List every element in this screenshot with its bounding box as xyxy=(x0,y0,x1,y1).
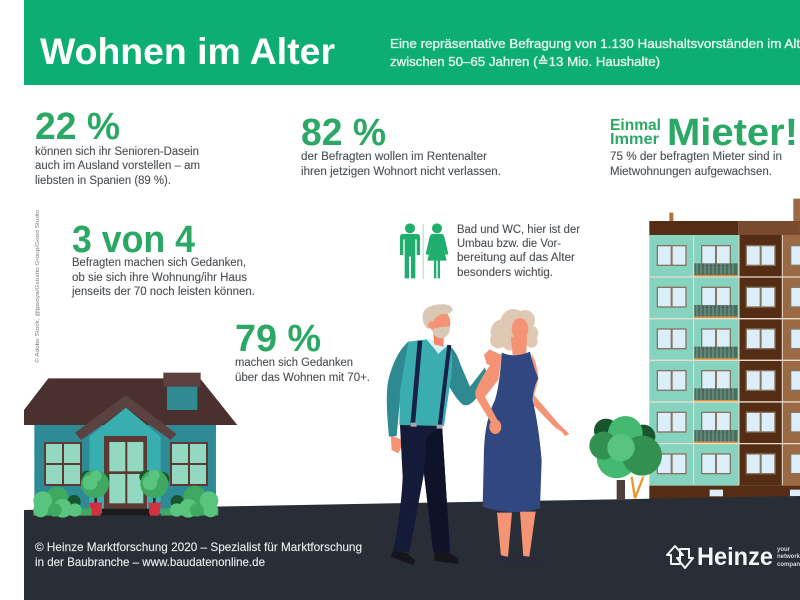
stat: 82 % xyxy=(301,112,501,178)
icon: logo arrows xyxy=(667,546,693,568)
stat: Einmal Mieter, immer Mieter: Immer xyxy=(610,131,659,148)
stat: 3 von 4: ob sie sich ihre Wohnung/ihr Haus xyxy=(72,272,247,284)
stat: 3 von 4: Befragten machen sich Gedanken, xyxy=(72,257,246,269)
text: bathroom note: bereitung auf das Alter xyxy=(457,252,575,264)
survey description: zwischen 50–65 Jahren (≙13 Mio. Haushalte) xyxy=(390,54,660,69)
stat: Einmal Mieter, immer Mieter xyxy=(610,112,798,178)
Heinze logo: your xyxy=(777,547,791,553)
text: bathroom note xyxy=(457,224,580,279)
man xyxy=(387,304,487,565)
stat: Einmal Mieter, immer Mieter: Mieter! xyxy=(667,112,798,154)
Heinze logo xyxy=(667,543,800,571)
topiary left xyxy=(94,493,97,505)
photo credit: © Adobe Stock, @jpsoya/Gstudio Group/Good Studio xyxy=(34,210,41,363)
footer text: © Heinze Marktforschung 2020 – Spezialist für Marktforschung xyxy=(35,540,362,554)
stat: 79 %: 79 % xyxy=(235,318,321,360)
survey description xyxy=(390,36,800,69)
door xyxy=(104,436,147,509)
stat: 3 von 4: jenseits der 70 noch leisten können. xyxy=(71,286,255,298)
stat: 22 % xyxy=(35,106,200,187)
stat: 82 %: der Befragten wollen im Rentenalter xyxy=(301,151,487,163)
stat: 79 % xyxy=(235,318,370,384)
illustration: house xyxy=(24,373,237,518)
title: Wohnen im Alter xyxy=(40,31,335,72)
roof xyxy=(24,378,237,425)
stat: 22 %: liebsten in Spanien (89 %). xyxy=(35,175,171,187)
woman xyxy=(475,309,569,565)
illustration: apartment building xyxy=(649,199,800,501)
bushes right xyxy=(161,508,218,516)
icon: bathroom figures xyxy=(400,223,448,279)
stat: Einmal Mieter, immer Mieter: Einmal xyxy=(610,117,661,134)
stat: 82 %: 82 % xyxy=(301,112,386,154)
stat: 3 von 4 xyxy=(71,219,255,298)
stat: Einmal Mieter, immer Mieter: 75 % der befragten Mieter sind in xyxy=(610,151,782,163)
footer text: in der Baubranche – www.baudatenonline.de xyxy=(35,555,265,569)
topiary right xyxy=(153,493,156,505)
footer text xyxy=(35,540,362,569)
survey description: Eine repräsentative Befragung von 1.130 Haushaltsvorständen im Alter xyxy=(390,36,800,51)
illustration: older couple xyxy=(387,304,569,565)
header band xyxy=(24,0,800,85)
stat: 82 %: ihren jetzigen Wohnort nicht verlassen. xyxy=(301,166,501,178)
stat: 22 %: auch im Ausland vorstellen – am xyxy=(35,160,200,172)
stat: 22 %: 22 % xyxy=(35,106,120,148)
stat: Einmal Mieter, immer Mieter: Mietwohnungen aufgewachsen. xyxy=(610,166,772,178)
Heinze logo: network xyxy=(777,554,800,560)
stat: 79 %: über das Wohnen mit 70+. xyxy=(235,372,370,384)
ground xyxy=(24,496,800,600)
text: bathroom note: Bad und WC, hier ist der xyxy=(457,224,580,236)
stat: 22 %: können sich ihr Senioren-Dasein xyxy=(35,146,199,158)
stat: 3 von 4: 3 von 4 xyxy=(72,219,195,261)
text: bathroom note: besonders wichtig. xyxy=(457,267,553,279)
text: bathroom note: Umbau bzw. die Vor- xyxy=(457,238,561,250)
illustration: tree xyxy=(589,416,662,499)
stat: 79 %: machen sich Gedanken xyxy=(235,357,353,369)
bushes left xyxy=(33,508,92,516)
Heinze logo: Heinze xyxy=(697,543,773,571)
